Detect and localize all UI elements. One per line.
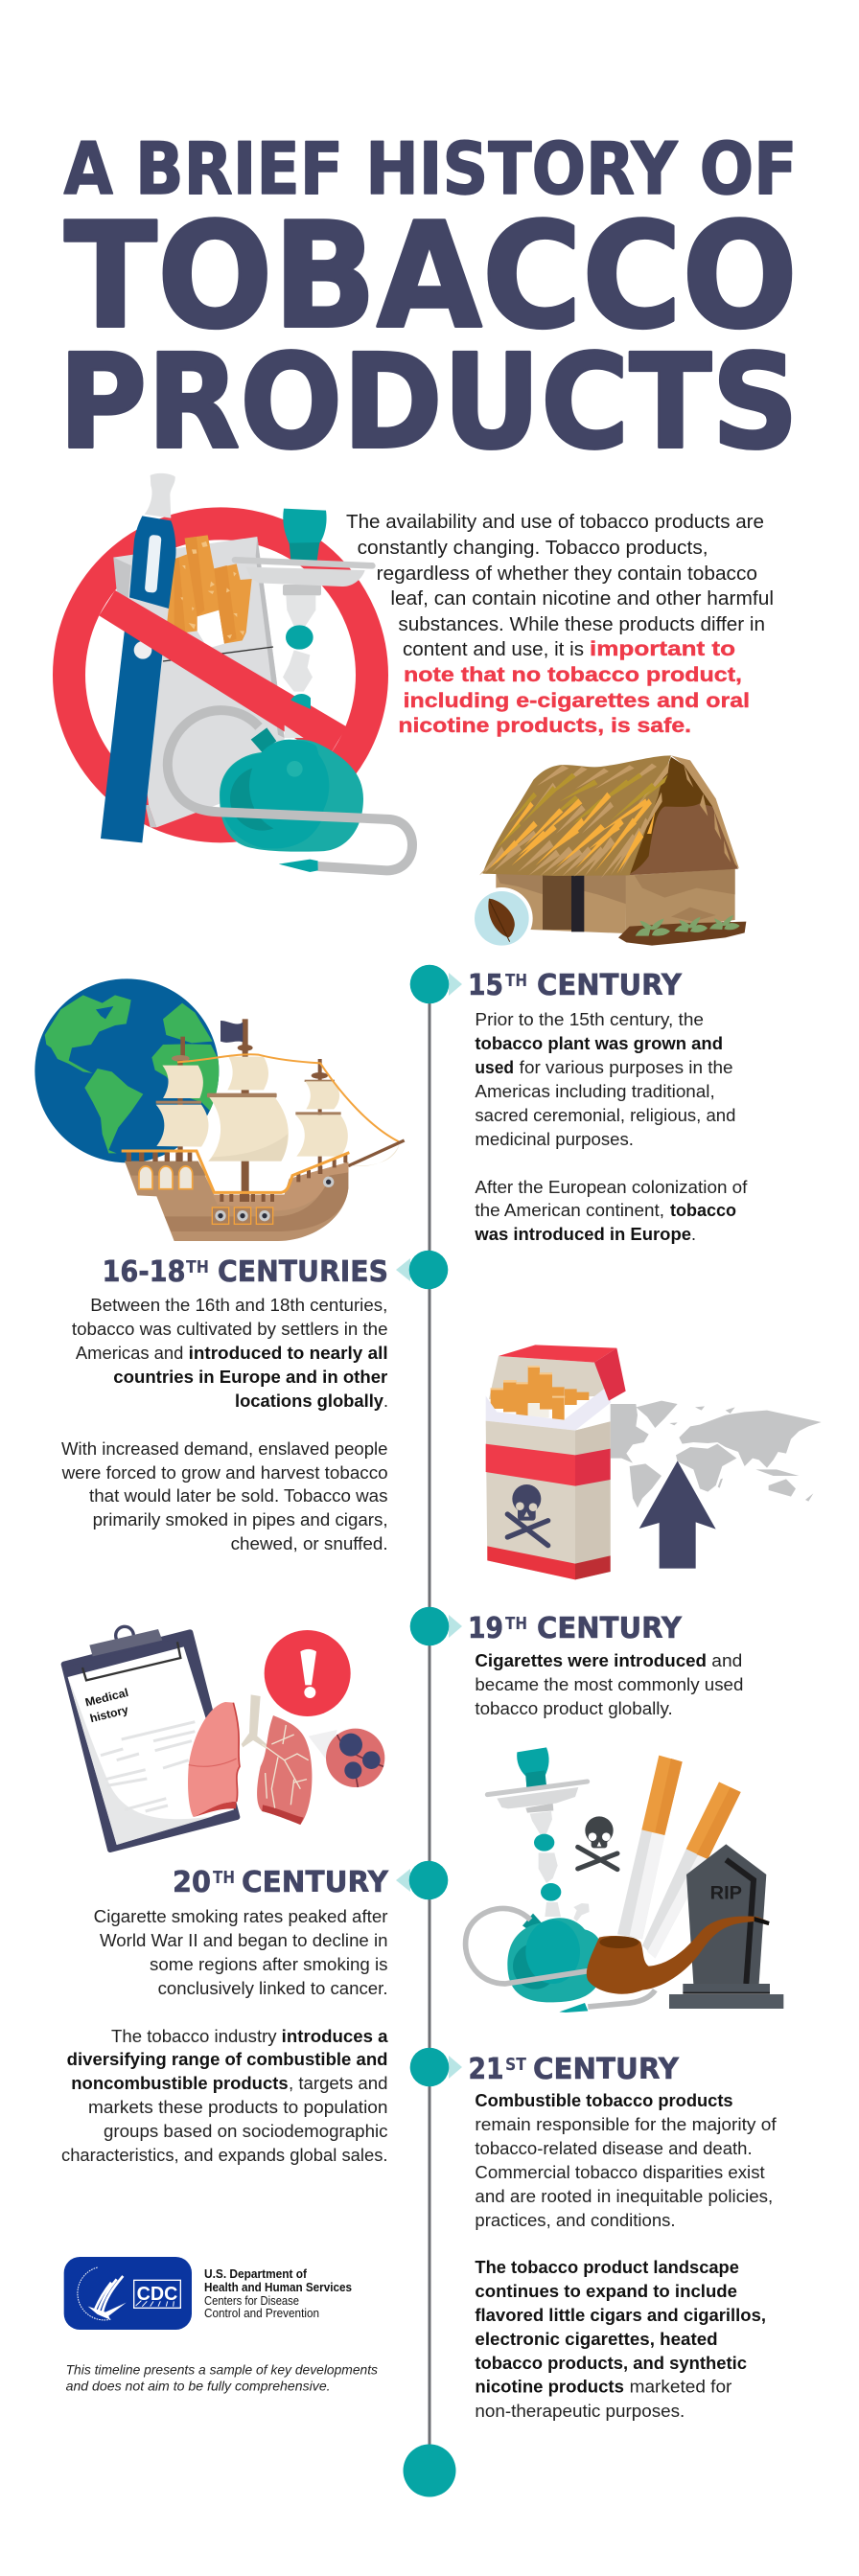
text: 16-18th centuries: Between the 16th and 18th centuries, [90, 1296, 387, 1315]
text: 19th century: tobacco product globally. [475, 1699, 673, 1718]
heading: 16-18th centuries: 16-18 [102, 1255, 186, 1289]
text: 16-18th centuries: primarily smoked in pipes and cigars, [93, 1510, 388, 1530]
text: 20th century: introduces a [282, 2027, 389, 2046]
disclaimer: This timeline presents a sample of key developments [66, 2362, 378, 2378]
disclaimer: and does not aim to be fully comprehensive. [66, 2379, 331, 2394]
text: 21st century: Commercial tobacco disparities exist [475, 2163, 765, 2182]
heading: 20th century [173, 1866, 389, 1899]
text: 19th century [475, 1651, 743, 1718]
disclaimer [66, 2362, 378, 2394]
text: 15th century: Americas including traditional, [475, 1082, 715, 1101]
text: 21st century: flavored little cigars and cigarillos, [475, 2306, 766, 2325]
heading: 15th century: 15 [468, 969, 503, 1002]
right lung [257, 1715, 312, 1825]
timeline marker: 21st century [410, 2048, 462, 2086]
hookah base [466, 1908, 655, 2012]
text: 20th century: markets these products to population [88, 2098, 387, 2117]
text: 16-18th centuries: countries in Europe and in other [113, 1368, 387, 1387]
timeline marker: 16-18th centuries [396, 1251, 448, 1289]
intro text: constantly changing. Tobacco products, [358, 538, 708, 559]
text: 21st century: non-therapeutic purposes. [475, 2402, 685, 2421]
left lung [188, 1702, 240, 1817]
text: 21st century: nicotine products [475, 2377, 624, 2396]
text: 16-18th centuries: locations globally [235, 1392, 383, 1411]
text: 20th century: Cigarette smoking rates peaked after [94, 1907, 388, 1926]
heading: 21st century: ST [505, 2056, 526, 2075]
text: 15th century: for various purposes in the [520, 1058, 733, 1077]
text: 16-18th centuries: Americas and [76, 1344, 183, 1363]
heading: 15th century [468, 969, 683, 1002]
text: 15th century: used [475, 1058, 514, 1077]
text: 19th century: and [711, 1651, 742, 1670]
text: 21st century: The tobacco product landscape [475, 2258, 739, 2277]
logo badge: CDC [137, 2283, 177, 2305]
heading: 16-18th centuries: CENTURIES [218, 1255, 388, 1289]
skull and crossbones on pack [507, 1484, 548, 1546]
timeline [396, 965, 462, 2497]
heading: 19th century [468, 1612, 683, 1645]
text: 21st century: and are rooted in inequitable policies, [475, 2187, 773, 2206]
cigarettes [617, 1756, 741, 1958]
text: 21st century: marketed for [630, 2377, 731, 2396]
text: 16-18th centuries: tobacco was cultivated by settlers in the [72, 1320, 388, 1339]
text: 21st century [475, 2091, 778, 2421]
heading: 15th century: TH [505, 972, 527, 991]
text: 15th century: sacred ceremonial, religious, and [475, 1106, 735, 1125]
text: 16-18th centuries: With increased demand, enslaved people [61, 1439, 387, 1459]
text: 15th century: . [691, 1225, 696, 1244]
clipboard [64, 1626, 237, 1850]
title: TOBACCO [64, 192, 798, 360]
trachea [242, 1694, 268, 1748]
text: 21st century: continues to expand to include [475, 2282, 737, 2301]
icon: cigarette pack, world map and up arrow [486, 1345, 822, 1579]
text: 20th century: , targets and [289, 2074, 387, 2093]
text: 16-18th centuries: were forced to grow and harvest tobacco [61, 1463, 388, 1483]
clipboard: history [88, 1703, 130, 1725]
text: 20th century: The tobacco industry [111, 2027, 277, 2046]
lung detail magnifier [309, 1729, 384, 1787]
logo: HHS and CDC: U.S. Department of [204, 2267, 308, 2281]
logo badge [64, 2257, 192, 2330]
text: 15th century: medicinal purposes. [475, 1130, 634, 1149]
alert circle [265, 1630, 351, 1716]
heading: 16-18th centuries [102, 1255, 388, 1289]
text: 16-18th centuries: . [383, 1392, 388, 1411]
text: 20th century: some regions after smoking is [150, 1955, 387, 1974]
timeline marker: 19th century [410, 1607, 462, 1645]
heading: 20th century: 20 [173, 1866, 211, 1899]
text: 15th century: the American continent, [475, 1201, 664, 1220]
title: PRODUCTS [58, 328, 799, 479]
icon: hookah, cigarettes, pipe and gravestone [466, 1747, 783, 2012]
intro text: substances. While these products differ in [398, 614, 765, 635]
text: 21st century: remain responsible for the majority of [475, 2115, 778, 2134]
text: 21st century: practices, and conditions. [475, 2211, 676, 2230]
heading: 21st century: 21 [468, 2053, 504, 2086]
intro text: The availability and use of tobacco products are [346, 512, 764, 533]
clipboard: Medical [83, 1686, 129, 1710]
text: 15th century: was introduced in Europe [474, 1225, 691, 1244]
title [58, 127, 799, 478]
text: 20th century: noncombustible products [71, 2074, 289, 2093]
skull and crossbones [578, 1816, 617, 1870]
text: 15th century: After the European colonization of [475, 1178, 748, 1197]
logo: HHS and CDC: Health and Human Services [204, 2281, 352, 2294]
gravestone [669, 1844, 783, 2009]
text: 20th century: World War II and began to decline in [100, 1931, 387, 1950]
logo: HHS and CDC: Control and Prevention [204, 2307, 319, 2320]
heading: 19th century: TH [505, 1615, 527, 1634]
text: 19th century: Cigarettes were introduced [475, 1651, 707, 1670]
text: 16-18th centuries: chewed, or snuffed. [231, 1534, 388, 1553]
text: 15th century: tobacco plant was grown and [475, 1034, 723, 1053]
timeline end marker [403, 2444, 456, 2497]
intro text: including e-cigarettes and oral [404, 690, 750, 712]
heading: 21st century [468, 2053, 680, 2086]
text: 21st century: tobacco-related disease and death. [475, 2139, 753, 2158]
text: 21st century: Combustible tobacco products [475, 2091, 733, 2110]
intro text: leaf, can contain nicotine and other harmful [390, 588, 774, 610]
intro text [346, 512, 774, 737]
gravestone: RIP [710, 1884, 742, 1904]
text: 15th century: Prior to the 15th century, the [475, 1010, 704, 1029]
world map [611, 1401, 822, 1507]
icon: medical clipboard, lungs and alert [64, 1626, 384, 1850]
text: 16-18th centuries [61, 1296, 388, 1553]
heading: 19th century: 19 [468, 1612, 503, 1645]
logo: HHS and CDC [64, 2257, 352, 2330]
text: 20th century: characteristics, and expands global sales. [61, 2146, 387, 2165]
text: 16-18th centuries: introduced to nearly all [189, 1344, 388, 1363]
text: 15th century: tobacco [670, 1201, 736, 1220]
heading: 19th century: CENTURY [537, 1612, 683, 1645]
text: 16-18th centuries: that would later be sold. Tobacco was [89, 1486, 387, 1506]
text: 19th century: became the most commonly used [475, 1675, 743, 1694]
text: 20th century: diversifying range of combustible and [67, 2050, 387, 2069]
icon: prohibited tobacco products [69, 473, 412, 872]
icon: thatched hut with tobacco leaf [471, 755, 746, 950]
cigarette pack [486, 1345, 626, 1579]
pipe [587, 1916, 770, 1994]
text: 21st century: electronic cigarettes, heated [475, 2330, 718, 2349]
timeline marker: 20th century [396, 1861, 448, 1899]
intro text: content and use, it is [403, 639, 584, 660]
timeline marker: 15th century [410, 965, 462, 1003]
heading: 20th century: CENTURY [242, 1866, 389, 1899]
logo: HHS and CDC: Centers for Disease [204, 2294, 299, 2308]
hookah stem [487, 1747, 590, 1921]
text: 20th century [61, 1907, 389, 2165]
up arrow [639, 1460, 716, 1569]
text: 20th century: conclusively linked to cancer. [158, 1979, 387, 1998]
text: 21st century: tobacco products, and synthetic [475, 2354, 747, 2373]
intro text: important to [590, 638, 735, 660]
intro text: note that no tobacco product, [404, 664, 742, 686]
heading: 20th century: TH [213, 1869, 235, 1888]
text: 20th century: groups based on sociodemographic [104, 2122, 387, 2141]
icon: globe and sailing ship [35, 978, 405, 1241]
intro text: regardless of whether they contain tobacco [377, 564, 757, 585]
heading: 21st century: CENTURY [533, 2053, 680, 2086]
intro text: nicotine products, is safe. [398, 715, 691, 737]
heading: 16-18th centuries: TH [186, 1258, 209, 1277]
text: 15th century [474, 1010, 748, 1244]
heading: 15th century: CENTURY [537, 969, 683, 1002]
